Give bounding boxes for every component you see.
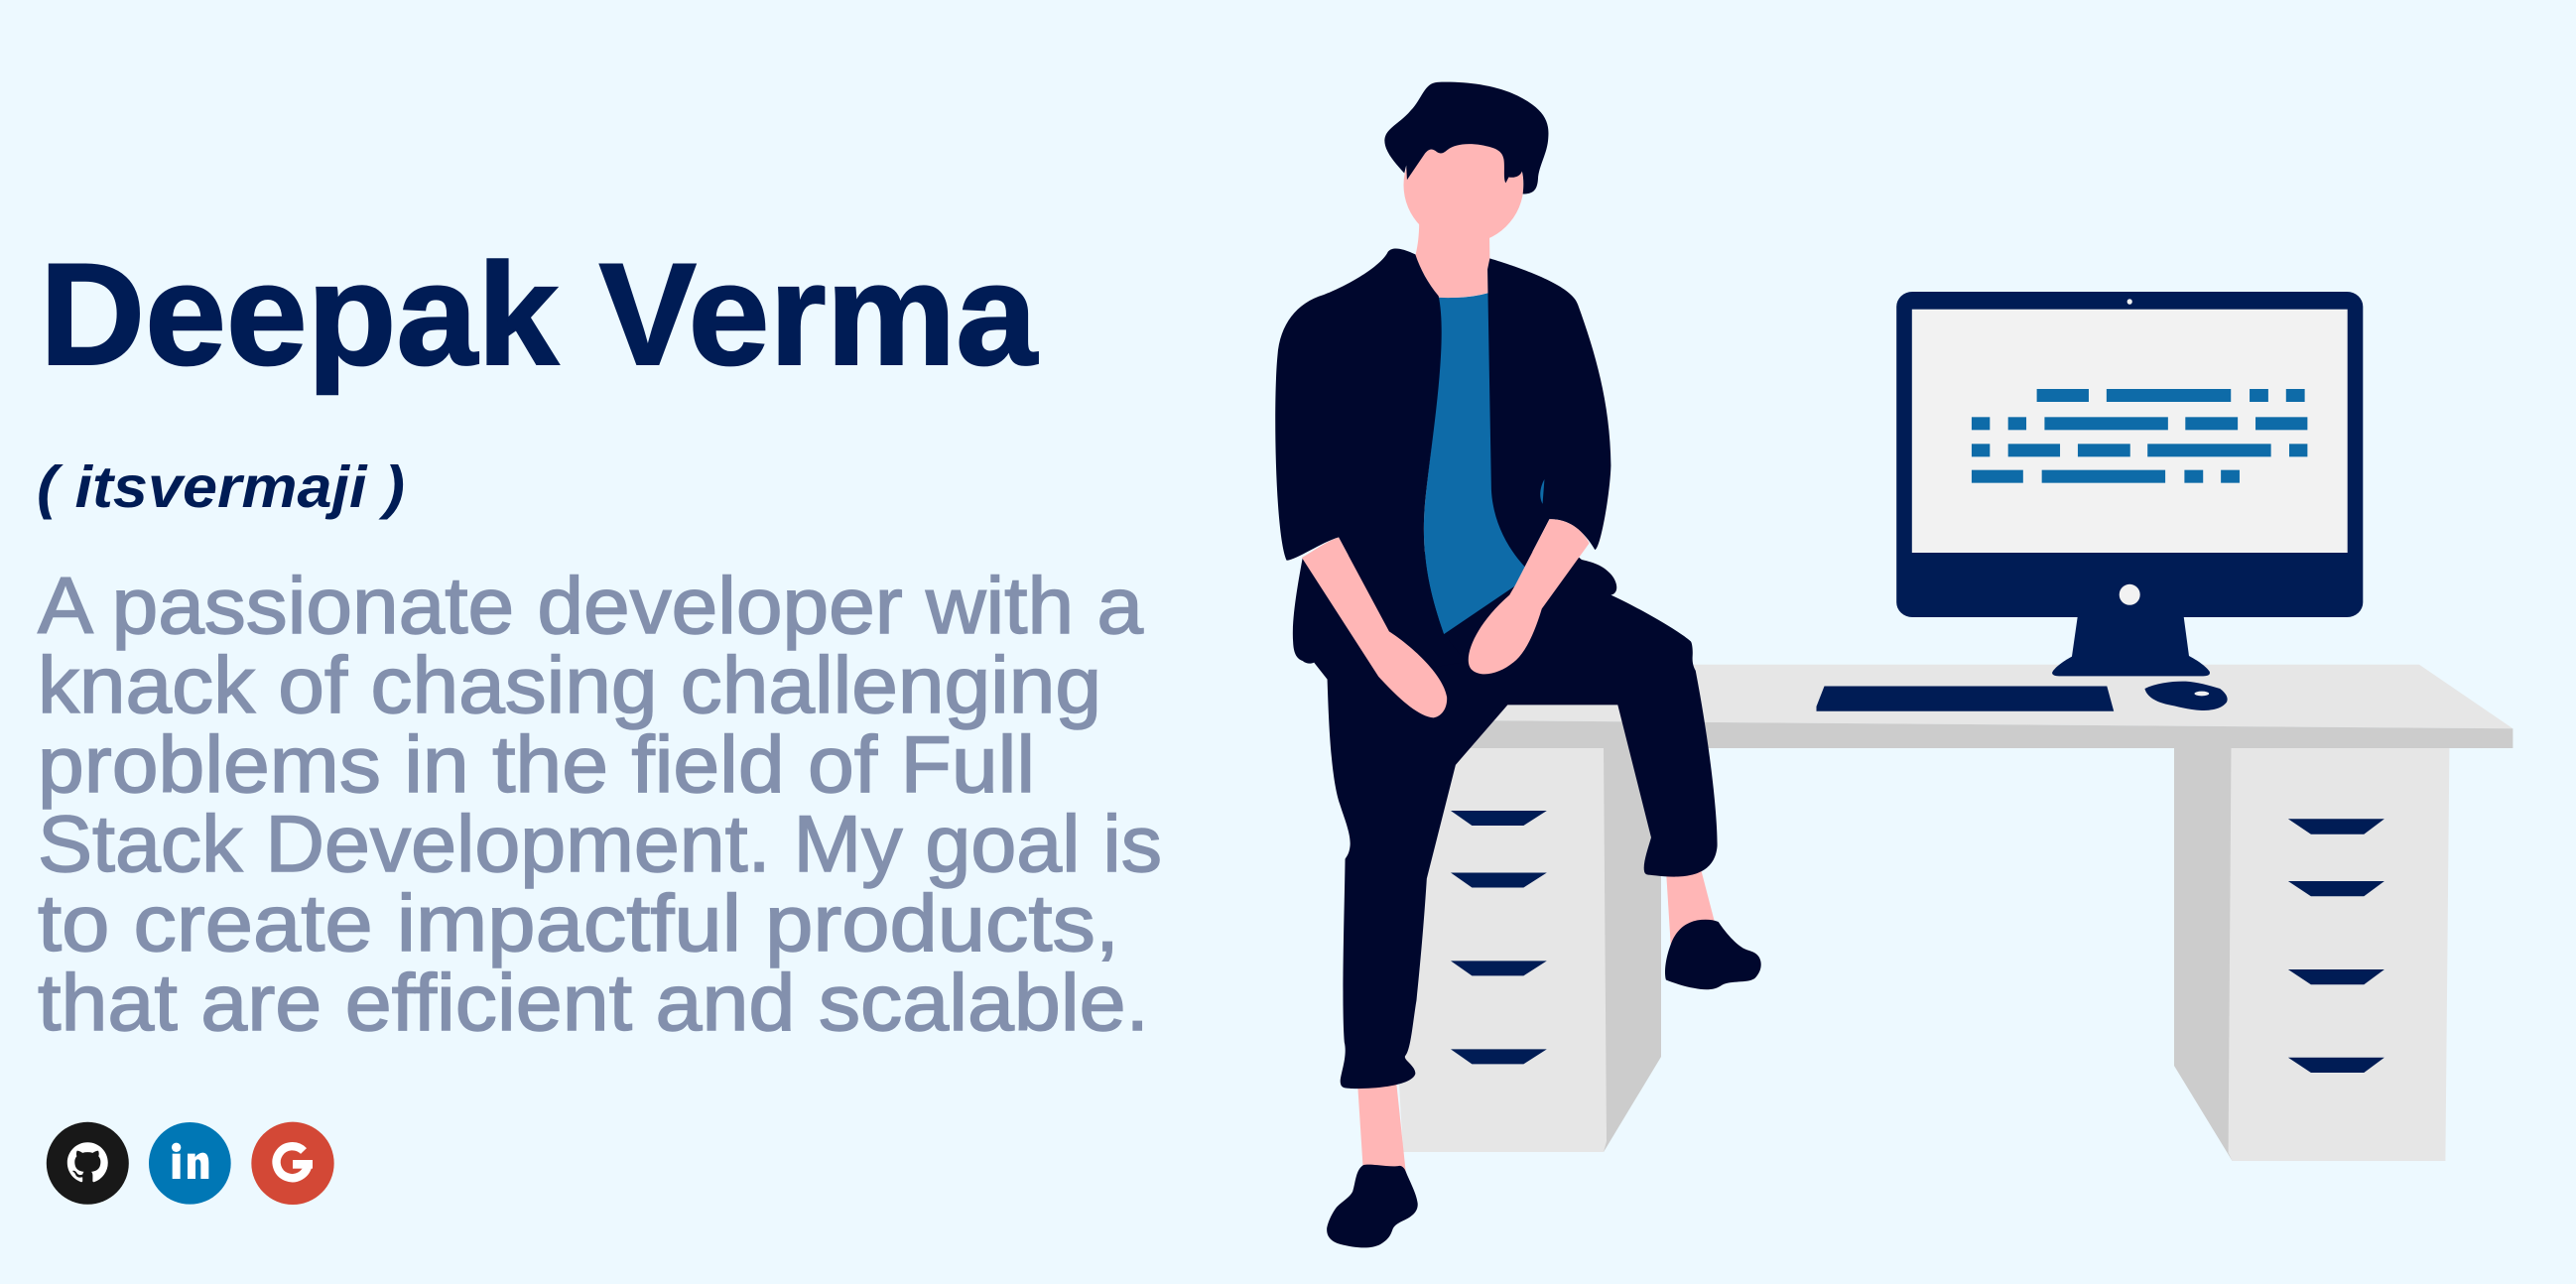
monitor button: [2120, 584, 2140, 605]
monitor body: [1896, 292, 2363, 617]
raised leg: [1666, 871, 1715, 948]
text block: bio paragraph: problems in the field of Full: [38, 720, 1035, 810]
right cabinet drawer handles: [2288, 819, 2384, 1073]
right cabinet side: [2174, 748, 2233, 1161]
monitor: [1896, 292, 2363, 676]
social icons row: [47, 1122, 334, 1205]
text block: bio paragraph: that are efficient and scalable.: [38, 959, 1149, 1048]
monitor camera: [2127, 299, 2132, 305]
text block: bio paragraph: [38, 562, 1162, 1048]
right forearm and hand: [1469, 519, 1590, 674]
icon: github: [47, 1122, 129, 1205]
subtitle: handle: ( itsvermaji ): [37, 454, 405, 520]
person: [1275, 82, 1761, 1247]
left cabinet side: [1604, 748, 1661, 1152]
standing leg: [1357, 1083, 1406, 1173]
illustration: desk with monitor and person: [1275, 82, 2512, 1247]
text block: bio paragraph: to create impactful products,: [38, 879, 1119, 968]
keyboard: [1816, 687, 2114, 711]
jacket right panel: [1487, 258, 1610, 567]
title: name: Deepak Verma: [40, 233, 1039, 395]
standing shoe: [1327, 1165, 1418, 1247]
shirt: [1424, 293, 1534, 634]
left cabinet front: [1379, 748, 1607, 1152]
left cabinet drawer handles: [1451, 811, 1547, 1064]
text block: bio paragraph: Stack Development. My goal is: [38, 800, 1162, 889]
right cabinet front: [2229, 748, 2449, 1161]
head and neck: [1403, 126, 1523, 298]
hair: [1384, 82, 1548, 194]
mouse: [2144, 682, 2228, 710]
desk top surface: [1469, 665, 2512, 728]
icon: google: [251, 1122, 334, 1205]
monitor stand: [2052, 615, 2210, 676]
code lines on screen: [1972, 389, 2307, 483]
pants: [1293, 552, 1718, 1089]
shirt sliver: [1540, 479, 1544, 504]
text block: bio paragraph: knack of chasing challenging: [38, 641, 1101, 730]
jacket left panel: [1275, 248, 1466, 668]
desk front edge: [1469, 720, 2512, 748]
icon: linkedin: [149, 1122, 231, 1205]
text block: bio paragraph: A passionate developer with a: [38, 562, 1144, 651]
monitor screen: [1912, 310, 2348, 553]
raised shoe: [1665, 920, 1761, 989]
left forearm and hand: [1302, 537, 1447, 717]
